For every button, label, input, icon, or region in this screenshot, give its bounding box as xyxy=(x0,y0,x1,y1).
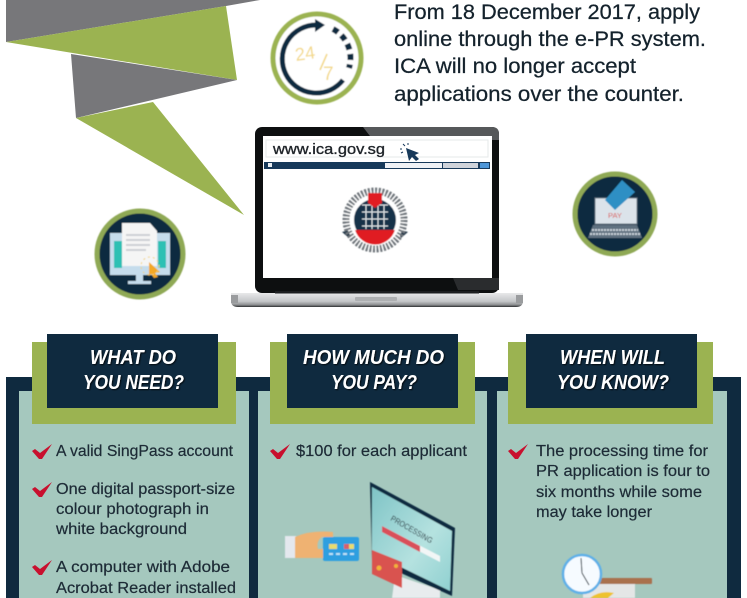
dark backing band xyxy=(6,377,741,598)
check item: SingPass: A valid SingPass account xyxy=(56,443,234,460)
panel: how much do you pay xyxy=(258,334,487,598)
panel background xyxy=(258,391,487,598)
website address box xyxy=(266,140,488,157)
icon: online document on monitor xyxy=(97,211,183,297)
intro text: apply online: applications over the counter. xyxy=(394,83,684,106)
heading: YOU KNOW? xyxy=(557,372,669,394)
heading xyxy=(47,334,218,408)
green header backing xyxy=(270,342,475,424)
check item: computer xyxy=(32,559,236,597)
green header backing xyxy=(32,342,236,424)
heading xyxy=(526,334,697,408)
laptop base xyxy=(231,291,523,307)
panel: when will you know xyxy=(497,334,727,598)
icon: online payment: PAY xyxy=(608,211,622,220)
icon: online payment xyxy=(575,174,655,254)
decorative folded ribbon banner xyxy=(6,0,260,215)
icon: hand with credit card xyxy=(285,532,359,561)
heading: YOU PAY? xyxy=(331,372,417,394)
check item: fee: $100 for each applicant xyxy=(296,443,468,460)
check item: processing time: six months while some xyxy=(536,484,702,501)
heading xyxy=(287,334,458,408)
heading: WHEN WILL xyxy=(560,347,665,369)
green header backing xyxy=(508,342,713,424)
check item: computer: Acrobat Reader installed xyxy=(56,580,236,597)
heading: HOW MUCH DO xyxy=(303,347,444,369)
check item: computer: A computer with Adobe xyxy=(56,559,230,576)
website navigation bar xyxy=(264,162,490,169)
icon: monitor processing payment: PROCESSING xyxy=(389,514,434,545)
intro text: apply online xyxy=(394,1,706,106)
icon: clock and desk xyxy=(563,555,652,598)
website address: www.ica.gov.sg xyxy=(272,141,385,158)
screen xyxy=(263,136,492,278)
laptop showing ICA website xyxy=(231,127,523,307)
check item: photograph: white background xyxy=(55,521,187,538)
panel background xyxy=(19,391,249,598)
icon: 24/7 clock xyxy=(273,14,361,102)
intro text: apply online: ICA will no longer accept xyxy=(394,55,636,78)
check item: processing time: PR application is four to xyxy=(536,463,710,480)
icon: 24/7 clock: 7 xyxy=(323,64,334,85)
intro text: apply online: From 18 December 2017, apply xyxy=(394,1,701,24)
intro text: apply online: online through the e-PR system. xyxy=(394,28,706,51)
check item: photograph: colour photograph in xyxy=(56,501,209,518)
heading: WHAT DO xyxy=(90,347,176,369)
icon: cursor xyxy=(400,143,419,161)
check item: photograph: One digital passport-size xyxy=(56,481,235,498)
icon: 24/7 clock: 24 xyxy=(294,42,316,65)
panel background xyxy=(497,391,727,598)
ICA emblem xyxy=(342,191,408,249)
panel: what do you need xyxy=(19,334,249,598)
check item: processing time: may take longer xyxy=(536,504,652,521)
heading: YOU NEED? xyxy=(83,372,184,394)
icon: monitor processing payment xyxy=(370,482,455,598)
laptop body xyxy=(255,127,499,293)
check item: processing time xyxy=(508,443,710,521)
check item: photograph xyxy=(32,481,235,538)
check item: processing time: The processing time for xyxy=(536,443,708,460)
